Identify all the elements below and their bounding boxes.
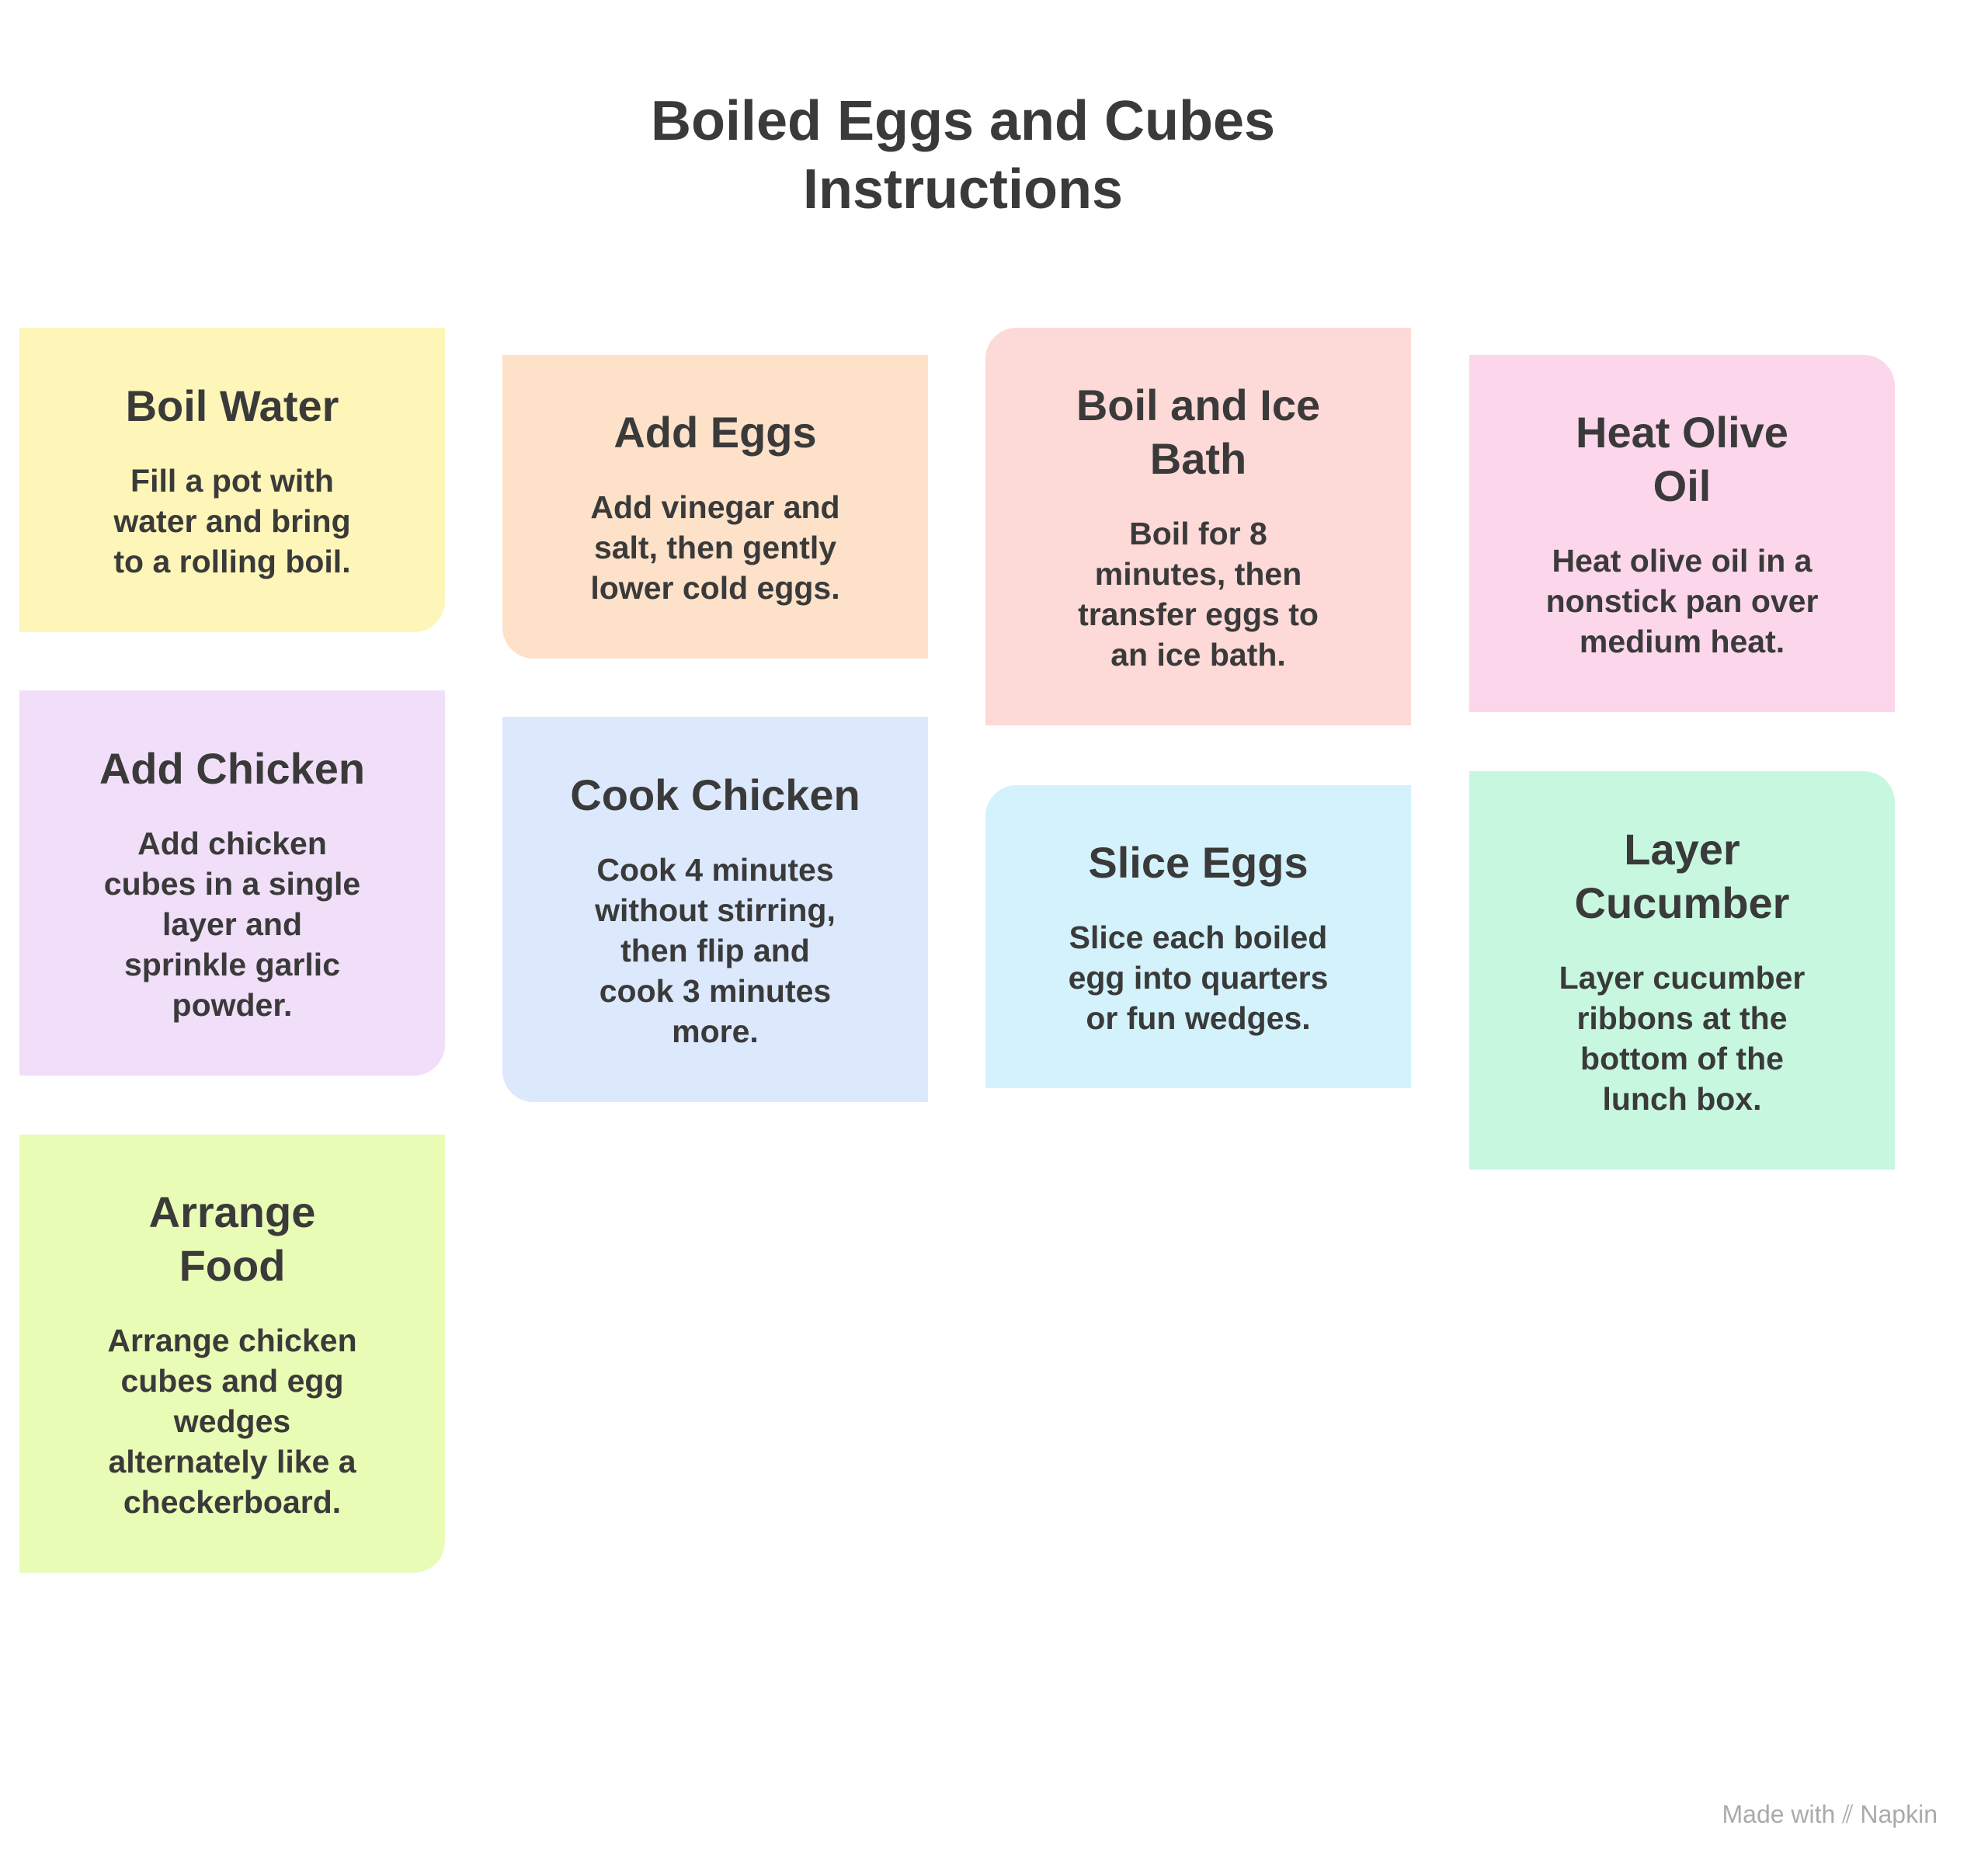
card: cook chicken: Cook 4 minutes [596,851,834,887]
card: boil and ice bath [985,328,1411,725]
card: arrange food: wedges [174,1403,290,1439]
card: cook chicken: more. [672,1013,759,1048]
card: layer cucumber [1469,771,1895,1170]
card: heat olive oil: Heat Olive [1576,408,1788,457]
card: arrange food: Food [179,1241,285,1290]
title: Instructions [803,158,1123,221]
card: slice eggs [985,785,1411,1088]
card: boil water: water and bring [113,503,351,539]
card: boil and ice bath: minutes, then [1095,556,1302,592]
card: boil water: Fill a pot with [130,463,334,499]
card: heat olive oil: Heat olive oil in a [1552,543,1812,579]
title [651,90,1275,221]
card: add chicken: Add Chicken [99,744,365,792]
card: boil water [19,328,445,632]
card: cook chicken: then flip and [620,932,810,968]
card: layer cucumber: ribbons at the [1576,1000,1788,1036]
card: boil and ice bath: an ice bath. [1110,637,1286,673]
card: arrange food: Arrange [149,1187,315,1236]
card: layer cucumber: Cucumber [1575,878,1789,927]
card: add eggs: Add Eggs [613,408,817,457]
card: heat olive oil: nonstick pan over [1546,583,1818,619]
card: arrange food: checkerboard. [123,1484,341,1520]
card: add chicken: powder. [172,986,292,1022]
card: boil water: to a rolling boil. [113,544,351,579]
card: cook chicken: cook 3 minutes [600,972,831,1008]
card: arrange food: cubes and egg [120,1363,344,1399]
card: boil and ice bath: Boil and Ice [1076,381,1320,429]
card: layer cucumber: lunch box. [1603,1081,1761,1117]
footer: Made with ⫽ Napkin [1722,1800,1938,1828]
card: slice eggs: Slice Eggs [1088,837,1309,887]
card: heat olive oil [1469,355,1895,712]
card: cook chicken [502,717,928,1102]
card: cook chicken: without stirring, [595,892,836,927]
card: add chicken: layer and [162,906,302,941]
card: heat olive oil: medium heat. [1580,624,1785,659]
card: arrange food: Arrange chicken [107,1323,357,1358]
card: add eggs: salt, then gently [594,530,836,565]
card: add chicken [19,690,445,1076]
card: arrange food [19,1135,445,1573]
title: Boiled Eggs and Cubes [651,90,1275,152]
card: add chicken: cubes in a single [104,865,360,901]
card: boil and ice bath: Bath [1150,434,1246,483]
card: add eggs [502,355,928,659]
card: layer cucumber: bottom of the [1580,1041,1784,1076]
card: layer cucumber: Layer cucumber [1559,960,1805,996]
card: slice eggs: or fun wedges. [1086,1000,1311,1036]
card: layer cucumber: Layer [1624,825,1740,873]
card: slice eggs: Slice each boiled [1069,920,1327,955]
card: cook chicken: Cook Chicken [570,770,860,819]
card: boil and ice bath: transfer eggs to [1078,596,1319,632]
card: boil water: Boil Water [126,381,339,430]
card: slice eggs: egg into quarters [1069,960,1328,996]
card: heat olive oil: Oil [1653,461,1711,510]
card: add chicken: Add chicken [137,825,327,861]
card: add chicken: sprinkle garlic [124,946,340,982]
card: boil and ice bath: Boil for 8 [1129,516,1267,551]
card: add eggs: lower cold eggs. [590,570,840,606]
card: arrange food: alternately like a [108,1444,356,1479]
card: add eggs: Add vinegar and [590,489,840,525]
